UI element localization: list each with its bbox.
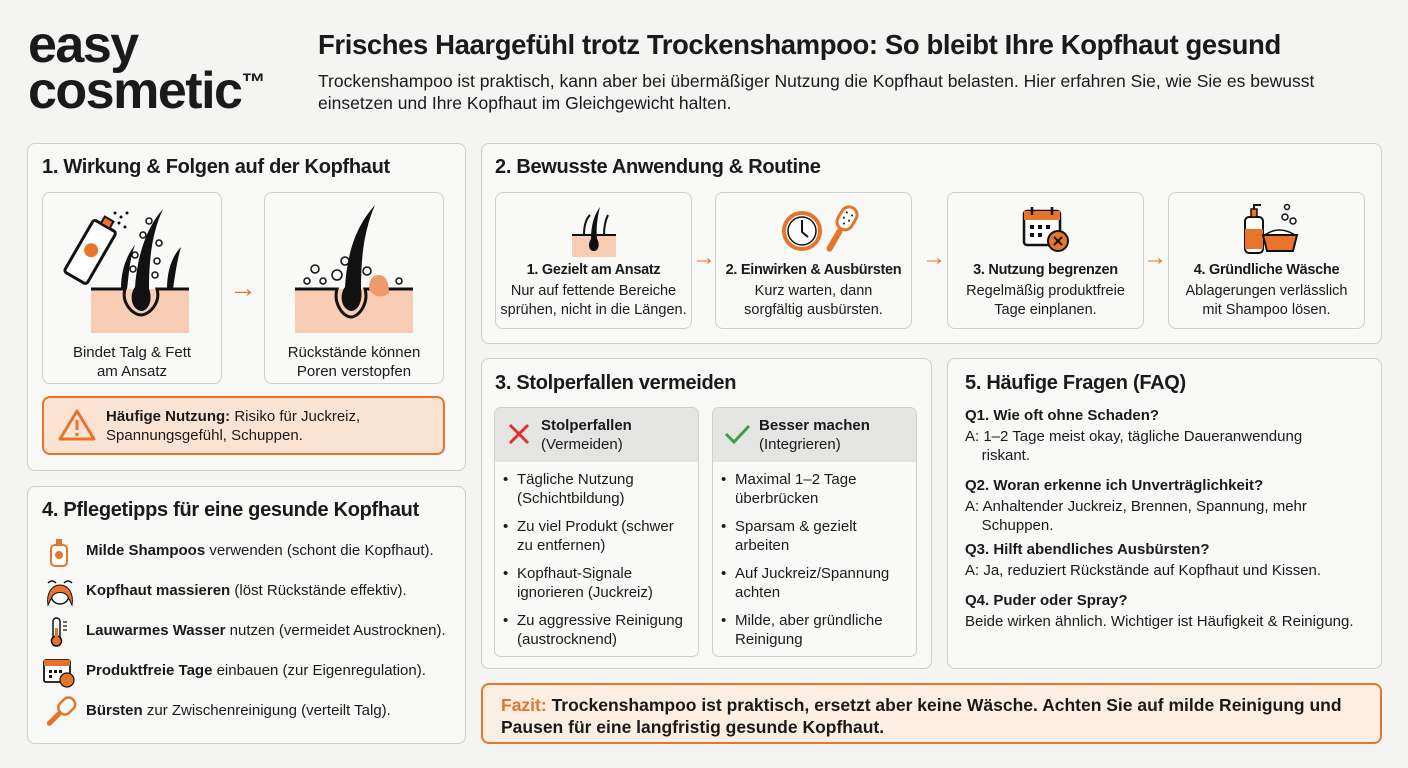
step 3	[947, 192, 1144, 329]
step 3: Tage einplanen.	[994, 302, 1097, 318]
step 1: sprühen, nicht in die Längen.	[500, 302, 687, 318]
faq list: riskant.	[982, 447, 1030, 464]
list: Maximal 1–2 Tage überbrücken	[735, 471, 856, 507]
caption: Rückstände können	[288, 344, 420, 361]
faq list: Beide wirken ähnlich. Wichtiger ist Häufigkeit & Reinigung.	[965, 613, 1354, 630]
icon: hair root	[572, 207, 616, 257]
callout: Fazit	[481, 683, 1382, 744]
icon: brush	[46, 696, 76, 726]
faq list: A: 1–2 Tage meist okay, tägliche Daueranwendung	[965, 428, 1302, 445]
heading: 4. Pflegetipps für eine gesunde Kopfhaut	[42, 499, 419, 521]
caption	[288, 344, 420, 380]
arrow: →	[229, 272, 257, 303]
faq list: Schuppen.	[982, 517, 1053, 534]
subtitle: Trockenshampoo ist praktisch, kann aber bei übermäßiger Nutzung die Kopfhaut belasten. Hier erfahren Sie, wie Sie es bewusst einsetzen und Ihre Kopfhaut im Gleichgewicht halten.	[318, 71, 1314, 113]
list: Zu aggressive Reinigung (austrocknend)	[517, 612, 683, 648]
list: Tägliche Nutzung (Schichtbildung)	[517, 471, 634, 507]
column: better	[712, 407, 917, 657]
panel: Pflegetipps	[27, 486, 466, 744]
caption	[73, 344, 191, 380]
heading: 2. Bewusste Anwendung & Routine	[495, 156, 821, 178]
step 1	[495, 192, 692, 329]
icon: calendar x	[1022, 207, 1069, 252]
panel: Wirkung & Folgen	[27, 143, 466, 471]
icon: check	[725, 425, 750, 444]
column: avoid	[494, 407, 699, 657]
card: Poren verstopfen	[264, 192, 444, 384]
icon: cross	[509, 424, 529, 444]
text	[106, 408, 360, 444]
heading: 3. Stolperfallen vermeiden	[495, 372, 736, 394]
step 2: Kurz warten, dann	[755, 283, 872, 299]
tip 4: Produktfreie Tage einbauen (zur Eigenregulation).	[86, 662, 426, 679]
list: Zu viel Produkt (schwer zu entfernen)	[517, 518, 674, 554]
logo: cosmetic™	[28, 62, 264, 120]
list: Auf Juckreiz/Spannung achten	[735, 565, 889, 601]
tip 4	[43, 659, 426, 688]
heading: 5. Häufige Fragen (FAQ)	[965, 372, 1186, 394]
tip 2	[47, 580, 407, 606]
header: Stolperfallen	[541, 417, 632, 434]
step 4: 4. Gründliche Wäsche	[1194, 262, 1339, 278]
step 4	[1168, 192, 1365, 329]
logo	[28, 16, 264, 120]
icon: head massage	[47, 580, 73, 606]
faq list: Q2. Woran erkenne ich Unverträglichkeit?	[965, 477, 1263, 494]
step 4: mit Shampoo lösen.	[1202, 302, 1331, 318]
tip 2: Kopfhaut massieren (löst Rückstände effektiv).	[86, 582, 407, 599]
arrow: →	[922, 244, 946, 271]
card: Talg binden	[42, 192, 222, 384]
panel: Bewusste Anwendung	[481, 143, 1382, 344]
icon: clock and brush	[782, 205, 859, 252]
step 1: 1. Gezielt am Ansatz	[527, 262, 660, 278]
icon: calendar	[43, 659, 75, 688]
faq list: Q4. Puder oder Spray?	[965, 592, 1128, 609]
tip 3: Lauwarmes Wasser nutzen (vermeidet Austrocknen).	[86, 622, 446, 639]
list: Sparsam & gezielt arbeiten	[735, 518, 857, 554]
text: Häufige Nutzung: Risiko für Juckreiz,	[106, 408, 360, 425]
icon: thermometer	[50, 617, 67, 647]
heading: 1. Wirkung & Folgen auf der Kopfhaut	[42, 156, 390, 178]
caption: Bindet Talg & Fett	[73, 344, 191, 361]
header: (Vermeiden)	[541, 436, 623, 453]
header: (Integrieren)	[759, 436, 841, 453]
faq list: Q1. Wie oft ohne Schaden?	[965, 407, 1159, 424]
step 2	[715, 192, 912, 329]
step 3: Regelmäßig produktfreie	[966, 283, 1125, 299]
arrow: →	[692, 244, 716, 271]
step 3: 3. Nutzung begrenzen	[973, 262, 1118, 278]
faq list: A: Ja, reduziert Rückstände auf Kopfhaut und Kissen.	[965, 562, 1321, 579]
header	[495, 408, 698, 462]
step 2: 2. Einwirken & Ausbürsten	[726, 262, 901, 278]
list: Kopfhaut-Signale ignorieren (Juckreiz)	[517, 565, 653, 601]
tip 1: Milde Shampoos verwenden (schont die Kopfhaut).	[86, 542, 434, 559]
header: Besser machen	[759, 417, 870, 434]
title: Frisches Haargefühl trotz Trockenshampoo: So bleibt Ihre Kopfhaut gesund	[318, 29, 1281, 60]
icon: spray on hair	[63, 209, 189, 333]
icon: shampoo bottle and bowl	[1244, 204, 1298, 254]
icon: warning	[58, 409, 96, 440]
tip 3	[50, 617, 446, 647]
faq list	[965, 407, 1354, 630]
caption: am Ansatz	[97, 363, 167, 380]
list	[722, 471, 889, 648]
list	[504, 471, 683, 648]
callout: warning	[42, 396, 445, 455]
tip 5	[46, 696, 391, 726]
faq list: A: Anhaltender Juckreiz, Brennen, Spannung, mehr	[965, 498, 1307, 515]
icon: clogged pore	[295, 205, 413, 333]
caption: Poren verstopfen	[297, 363, 411, 380]
header	[713, 408, 916, 462]
step 1: Nur auf fettende Bereiche	[511, 283, 676, 299]
text: Spannungsgefühl, Schuppen.	[106, 427, 303, 444]
step 4: Ablagerungen verlässlich	[1185, 283, 1348, 299]
tip 5: Bürsten zur Zwischenreinigung (verteilt Talg).	[86, 702, 391, 719]
panel: Stolperfallen	[481, 358, 932, 669]
callout: Fazit: Fazit: Trockenshampoo ist praktisch, ersetzt aber keine Wäsche. Achten Sie auf milde Reinigung und Pausen für eine langfristig gesunde Kopfhaut.	[501, 695, 1342, 737]
icon: shampoo	[50, 539, 68, 567]
panel: FAQ	[947, 358, 1382, 669]
faq list: Q3. Hilft abendliches Ausbürsten?	[965, 541, 1209, 558]
logo: easy	[28, 16, 138, 74]
step 2: sorgfältig ausbürsten.	[744, 302, 883, 318]
tip 1	[50, 539, 434, 567]
list: Milde, aber gründliche Reinigung	[735, 612, 883, 648]
arrow: →	[1143, 244, 1167, 271]
